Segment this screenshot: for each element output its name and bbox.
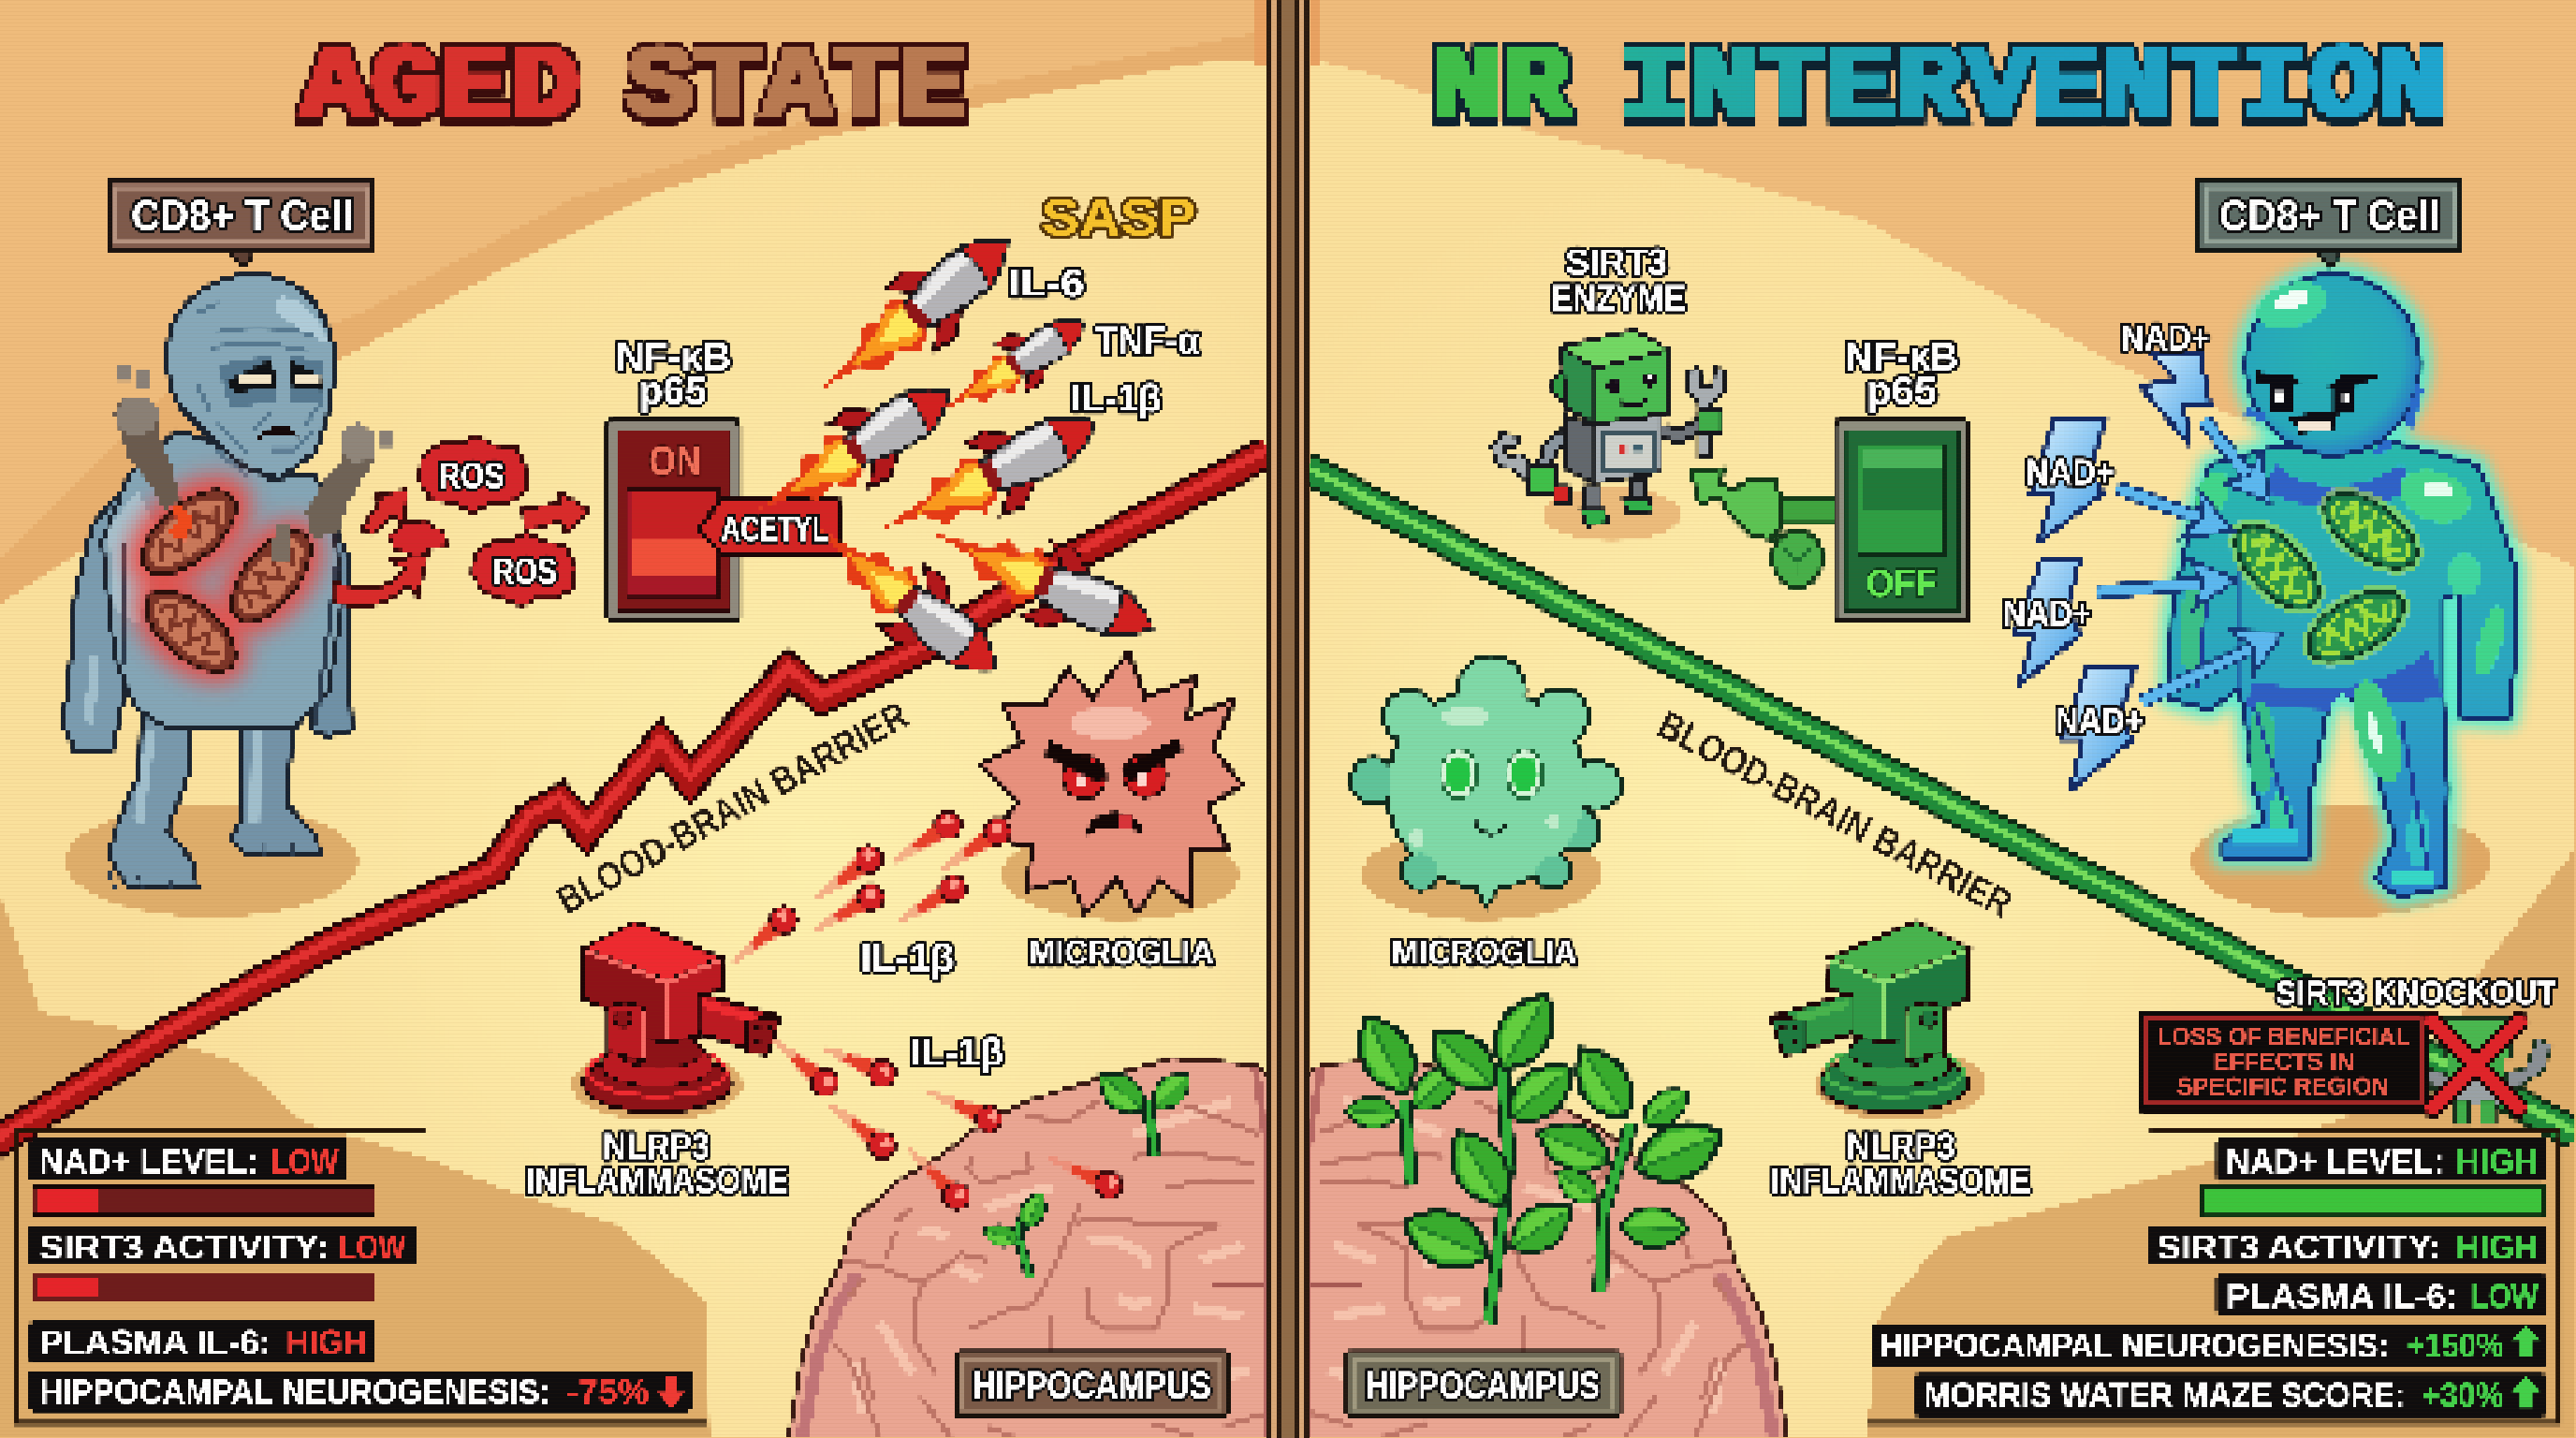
title: NR INTERVENTION: NR (1431, 30, 1572, 146)
title: AGED STATE: AGED (300, 30, 580, 146)
stats text: aged: -75% (567, 1372, 649, 1411)
callout text: loss of beneficial effects (2157, 1022, 2410, 1100)
stats text: aged: SIRT3 ACTIVITY: (39, 1227, 329, 1266)
ground shadow under healthy T cell (2191, 805, 2491, 917)
sprout on brain 1 (1089, 1062, 1198, 1155)
title: NR INTERVENTION: INTERVENTION (1620, 30, 2446, 146)
stats text: aged: LOW (339, 1227, 406, 1266)
healthy mitochondria (2212, 502, 2342, 632)
labels: ROS: ROS (493, 551, 557, 592)
label: NLRP3 inflammasome right: INFLAMMASOME (1771, 1161, 2030, 1201)
labels: cytokines: IL-1β (1071, 376, 1162, 419)
stats text: NR: HIGH (2456, 1142, 2539, 1181)
label: NF-kB p65: NF-κB (616, 334, 731, 378)
labels: NAD+: NAD+ (2121, 318, 2210, 359)
CD8+ tag speech box (110, 181, 373, 268)
hippocampus tag left (956, 1352, 1227, 1416)
green inhibition arrow from switch (1690, 468, 1835, 587)
stats text: NR: +150% (2407, 1327, 2504, 1365)
label: NLRP3 inflammasome right (1771, 1126, 2030, 1201)
title: AGED STATE (300, 30, 968, 146)
angry determined face (2254, 372, 2382, 391)
sprout on brain 2 (980, 1188, 1052, 1277)
eyes (227, 359, 276, 392)
ROS cloud 1 (419, 435, 526, 513)
label: NF-kB p65 right: NF-κB (1845, 334, 1958, 378)
stats text: aged: NAD+ LEVEL: (39, 1142, 258, 1181)
stats text: NR: MORRIS WATER MAZE SCORE: (1924, 1375, 2405, 1414)
labels: cytokines: IL-6 (1009, 261, 1084, 304)
stat bars and pills (30, 1138, 692, 1412)
labels: NAD+ (2002, 318, 2210, 741)
label: SIRT3 enzyme: SIRT3 (1566, 242, 1667, 283)
centre divider pillar (1266, 0, 1310, 1438)
label: microglia: MICROGLIA (1029, 933, 1214, 972)
NLRP3 shadow right (1815, 1049, 1986, 1121)
stat bars and pills right (1871, 1138, 2546, 1416)
label: CD8+ T Cell right: CD8+ T Cell (2219, 192, 2439, 240)
label: NF-kB p65: p65 (639, 369, 707, 413)
labels: IL-1beta projectiles (861, 936, 1003, 1073)
labels: cytokines (1009, 261, 1199, 419)
label: CD8+ T Cell: CD8+ T Cell (131, 192, 353, 240)
label: NLRP3 inflammasome: INFLAMMASOME (526, 1161, 788, 1201)
ROS arrow from cell (333, 555, 427, 607)
labels: ROS: ROS (439, 456, 505, 496)
labels: IL-1beta projectiles: IL-1β (910, 1030, 1003, 1073)
label: hippocampus: HIPPOCAMPUS (973, 1364, 1211, 1407)
callout text: loss of beneficial effects: SPECIFIC REGION (2177, 1072, 2389, 1100)
ground shadow microglia (1003, 829, 1238, 920)
labels: NAD+: NAD+ (2026, 453, 2115, 493)
labels: cytokines: TNF-α (1096, 318, 1199, 361)
label: NLRP3 inflammasome right: NLRP3 (1847, 1126, 1955, 1167)
label: SASP: SASP (1042, 189, 1196, 246)
NAD+ lightning bolts (2014, 352, 2210, 790)
stats text: NR: PLASMA IL-6: (2226, 1277, 2458, 1315)
stats text: NR: +30% (2422, 1375, 2504, 1414)
IL-1beta projectiles (724, 807, 1126, 1215)
label: microglia right: MICROGLIA (1392, 933, 1577, 972)
stats text: aged: LOW (271, 1142, 339, 1181)
ROS small blob (389, 521, 446, 557)
SIRT3 robot shadow (1543, 488, 1680, 540)
stats text: NR (1880, 1142, 2539, 1414)
ROS arrows (361, 490, 590, 534)
callout text: loss of beneficial effects: EFFECTS IN (2213, 1048, 2354, 1076)
label: ACETYL: ACETYL (721, 509, 828, 548)
panel text: aged state labels (39, 189, 1214, 1411)
blood-brain barrier: intact green wall (1306, 466, 2576, 1134)
knockout mini robot (2428, 1019, 2552, 1123)
stats text: aged: HIPPOCAMPAL NEUROGENESIS: (39, 1372, 550, 1411)
stats text: aged (39, 1142, 685, 1411)
SIRT3 enzyme robot (1492, 330, 1725, 526)
SASP rockets (738, 208, 1169, 701)
microglia shadow (1362, 829, 1602, 920)
callout text: loss of beneficial effects: LOSS OF BENEFICIAL (2157, 1022, 2410, 1050)
label: NF-kB p65 (616, 334, 731, 413)
label: NF-kB p65 right: p65 (1866, 369, 1937, 413)
stats text: NR: LOW (2471, 1277, 2539, 1315)
label: ON: ON (649, 438, 701, 484)
ground shadow under aged T cell (66, 805, 359, 917)
labels: ROS (439, 456, 557, 592)
glow around healthy T cell (2169, 272, 2515, 897)
ROS cloud 2 (472, 533, 575, 607)
smoke (113, 365, 391, 562)
labels: NAD+: NAD+ (2002, 594, 2091, 635)
hippocampus tag right (1347, 1352, 1620, 1416)
stats text: aged: HIGH (285, 1323, 366, 1361)
friendly microglia (1349, 654, 1623, 912)
green inflammasome cannon (1771, 922, 1969, 1112)
label: NLRP3 inflammasome (526, 1126, 788, 1201)
aged CD8+ T cell character (63, 274, 391, 889)
stats text: NR: SIRT3 ACTIVITY: (2157, 1227, 2441, 1266)
label: NF-kB p65 right (1845, 334, 1958, 413)
brain right (1306, 1058, 1788, 1438)
mouth (256, 426, 304, 442)
blood-brain barrier: damaged red wall (0, 448, 1268, 1145)
brain left (788, 1058, 1270, 1438)
panel: NR intervention (1306, 30, 2576, 1438)
label: blood-brain barrier right: BLOOD-BRAIN BARRIER (1651, 702, 2020, 926)
NAD+ arrows (2095, 405, 2294, 724)
label: hippocampus right: HIPPOCAMPUS (1365, 1364, 1600, 1407)
labels: IL-1beta projectiles: IL-1β (861, 936, 955, 979)
NLRP3 shadow (572, 1049, 742, 1121)
stats text: NR: HIGH (2456, 1227, 2539, 1266)
healthy plants on brain (1343, 983, 1732, 1323)
angry microglia (981, 653, 1242, 914)
label: blood-brain barrier: BLOOD-BRAIN BARRIER (549, 693, 915, 922)
NF-kB switch OFF (1835, 420, 1969, 621)
stats text: NR: NAD+ LEVEL: (2226, 1142, 2445, 1181)
labels: NAD+: NAD+ (2056, 701, 2144, 741)
red glow around mitochondria (106, 453, 271, 611)
NF-kB switch ON (607, 420, 739, 621)
CD8+ tag right (2198, 181, 2461, 268)
label: OFF: OFF (1866, 561, 1937, 605)
label: SIRT3 enzyme (1551, 242, 1686, 319)
label: NLRP3 inflammasome: NLRP3 (603, 1126, 710, 1167)
stats panel frame (18, 1129, 707, 1423)
panel: aged state (0, 30, 1270, 1438)
acetyl tag (698, 500, 842, 555)
stats panel frame right (1866, 1129, 2559, 1423)
red inflammasome cannon (583, 922, 781, 1112)
stats text: aged: PLASMA IL-6: (39, 1323, 271, 1361)
knockout callout box (2139, 1012, 2428, 1110)
stats text: NR: HIPPOCAMPAL NEUROGENESIS: (1880, 1327, 2389, 1365)
red X over knockout robot (2433, 1022, 2519, 1108)
label: SIRT3 enzyme: ENZYME (1551, 279, 1686, 319)
healthy CD8+ T cell character (2169, 273, 2515, 897)
title: AGED STATE: STATE (626, 30, 968, 146)
panel text: NR intervention labels (1365, 192, 2556, 1414)
label: SIRT3 knockout: SIRT3 KNOCKOUT (2276, 975, 2556, 1011)
